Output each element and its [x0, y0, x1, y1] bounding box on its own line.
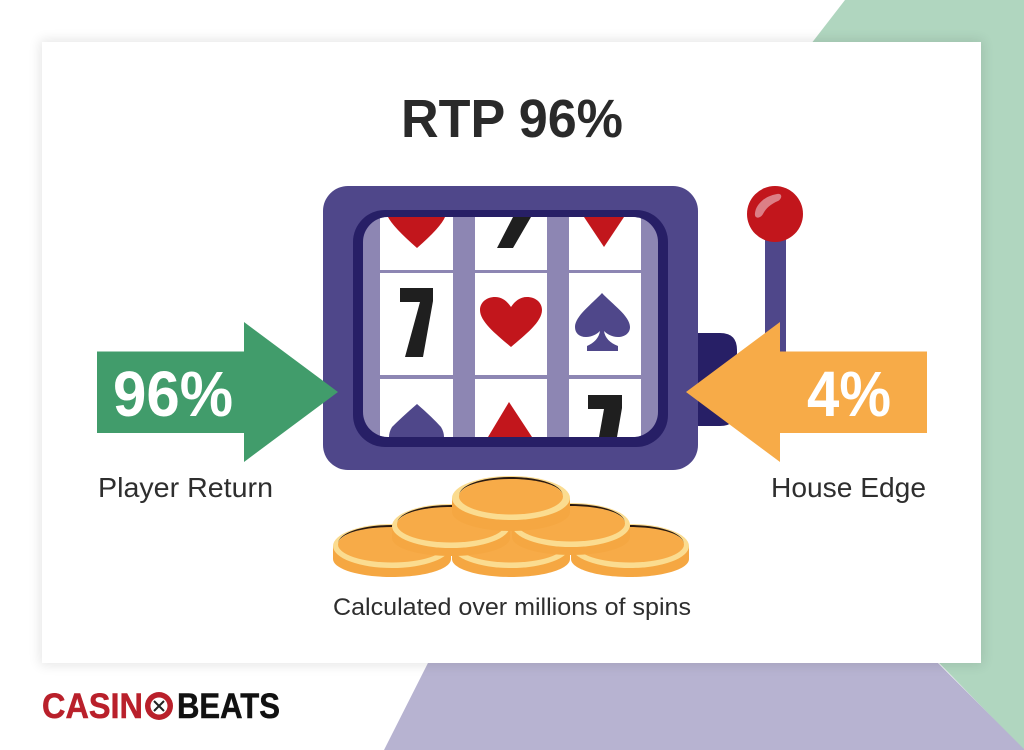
machine body [323, 186, 698, 470]
side nub [698, 333, 737, 426]
card shadow [40, 40, 983, 665]
background: purple shape [384, 655, 1024, 750]
reel 2 [475, 217, 547, 437]
logo: CasinoBeats: CASIN [42, 687, 143, 726]
label: player return: Player Return [98, 472, 273, 503]
orange arrow: 4%: 4% [807, 358, 891, 430]
green arrow: 96%: 96% [113, 358, 233, 430]
screen frame [353, 210, 668, 447]
reels [363, 217, 658, 437]
coin pile [333, 476, 689, 577]
logo: CasinoBeats [42, 687, 280, 726]
slot machine [323, 186, 803, 470]
title: RTP 96% [401, 89, 623, 149]
label: house edge: House Edge [771, 472, 926, 503]
reel 1 [380, 217, 453, 437]
green arrow: 96% [97, 322, 338, 462]
white card panel [42, 42, 981, 663]
caption: Calculated over millions of spins [333, 594, 691, 621]
reel 3 [569, 217, 641, 437]
logo: CasinoBeats: BEATS [177, 687, 280, 726]
background: green shape [780, 0, 1024, 750]
orange arrow: 4% [686, 322, 927, 462]
lever [747, 186, 803, 360]
